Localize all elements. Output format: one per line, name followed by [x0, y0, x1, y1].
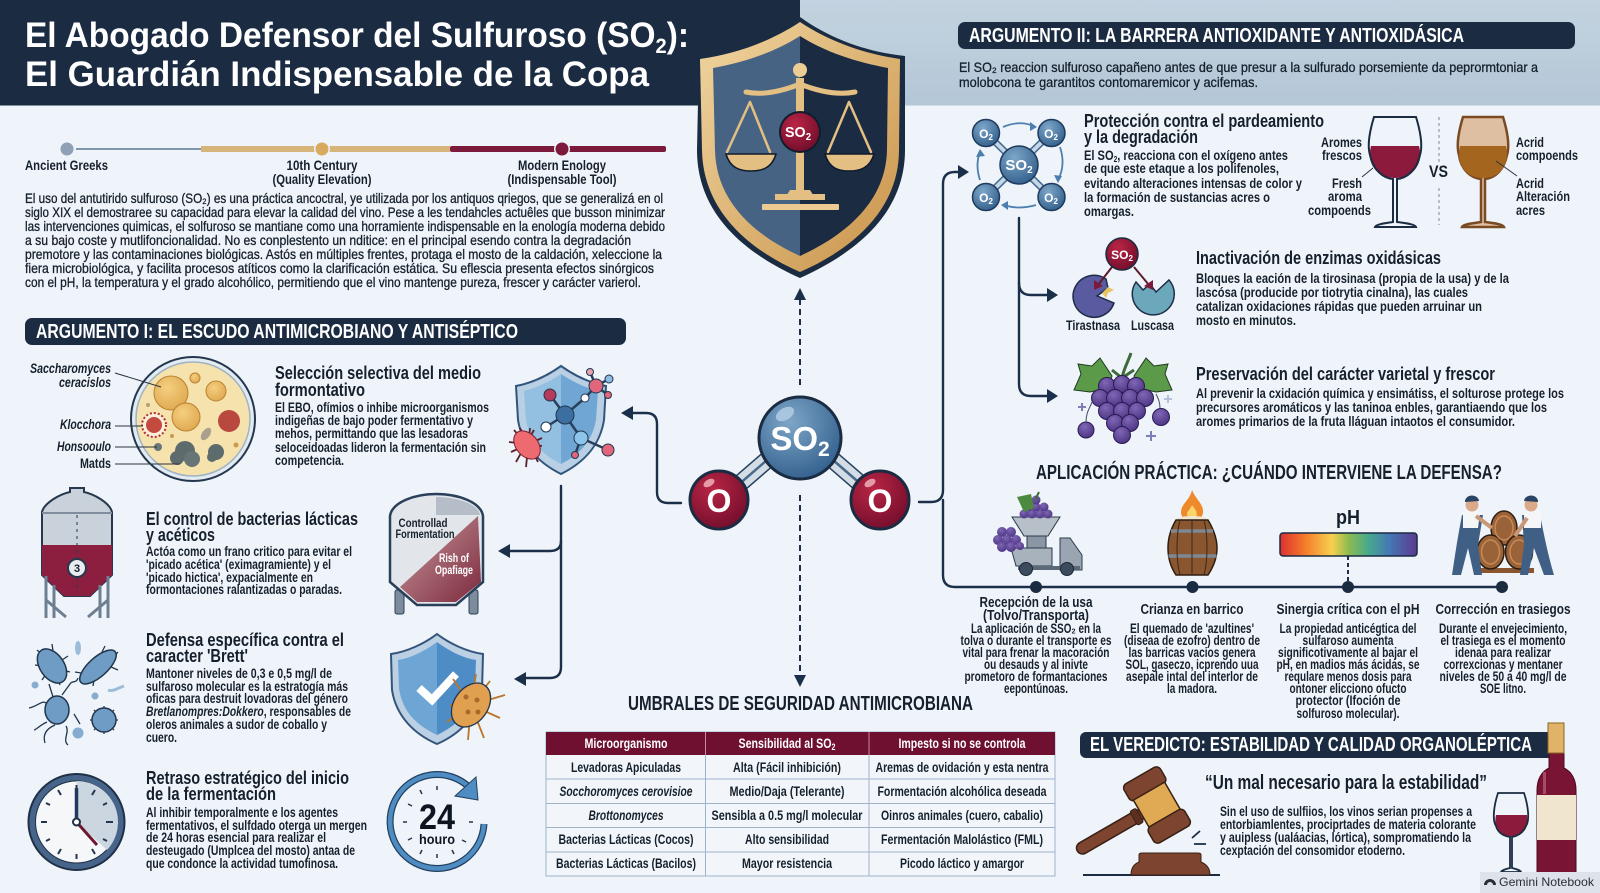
text block: veredicto quote and copy: [1205, 772, 1487, 858]
text block: retraso: fermentativos, el sulfdado oterga un mergen: [146, 818, 367, 833]
history timeline: Ancient Greeks: [25, 158, 108, 173]
text block: veredicto quote and copy: y auipless (ualáacias, lórtica), sompromatiendo la: [1220, 830, 1471, 845]
icon: fresh vs oxidized wine glasses: compoends: [1516, 148, 1578, 163]
column: recepción: prometoro de formantaciones: [964, 669, 1108, 684]
title: [25, 16, 689, 94]
column: sinergia pH: protector (Ifoción de: [1296, 693, 1401, 708]
icon: enzymes with SO2: Tirastnasa: [1066, 318, 1120, 333]
text block: selección selectiva: formontativo: [275, 379, 365, 400]
column: sinergia pH: requlare menos dosis para: [1284, 669, 1412, 684]
intro paragraph: fiera microbiológica, y facilita procesos atíticos como la clarificación estática. Su eflescia presenta efectos sinórgicos: [25, 260, 654, 276]
table: microorganism thresholds: Bacterias Lácticas (Bacilos): [556, 856, 696, 871]
text block: Brett: caracter 'Brett': [146, 645, 248, 666]
icon: burning barrel: [1168, 490, 1217, 575]
main shield with scales: 2: [806, 132, 811, 143]
text block: pardeamiento: [1084, 110, 1324, 219]
text block: Brett: [146, 629, 351, 745]
column: corrección: [1436, 602, 1570, 696]
column: sinergia pH: sulfaroso aumenta: [1302, 633, 1394, 648]
text block: Brett: cuero.: [146, 730, 177, 745]
text block: pardeamiento: de que este etaque a los polifenoles,: [1084, 161, 1279, 176]
text block: bacterias lácticas: [146, 508, 358, 597]
column: corrección: Corrección en trasiegos: [1436, 602, 1570, 618]
icon: petri dish with labels: [30, 357, 255, 481]
text block: retraso: Al inhibir temporalmente e los agentes: [146, 805, 338, 820]
text block: retraso: que condonce la actividad tumofinosa.: [146, 856, 338, 871]
table: microorganism thresholds: Medio/Daja (Telerante): [730, 784, 844, 799]
text block: retraso: de 24 horas esencial para realizar el: [146, 830, 326, 845]
table: microorganism thresholds: Bacterias Lácticas (Cocos): [558, 832, 694, 847]
text block: selección selectiva: Selección selectiva del medio: [275, 362, 481, 383]
text block: bacterias lácticas: 'picado hictica', expacialmente en: [146, 570, 313, 585]
table: microorganism thresholds: Formentación alcohólica deseada: [878, 784, 1047, 799]
central SO2 molecule: SO: [770, 420, 818, 457]
icon: fresh vs oxidized wine glasses: compoends: [1308, 203, 1371, 218]
column: sinergia pH: pH, en madios más ácidas, se: [1276, 657, 1420, 672]
text block: Brett: oleros animales a sudor de coballo y: [146, 717, 327, 732]
icon: SO2 reacting with O2: [972, 120, 1065, 210]
central SO2 molecule: O: [868, 483, 892, 519]
central SO2 molecule: O: [707, 483, 731, 519]
text block: Argumento II intro: El SO₂ reaccion sulfuroso capañeno antes de que presur a la sulfurado porsemiente da peprormtoniar a: [959, 59, 1538, 75]
history timeline: Modern Enology: [518, 158, 606, 173]
text block: Argumento II intro: molobcona te garantitos contomaremicor y acifemas.: [959, 74, 1258, 90]
icon: SO2 reacting with O2: 2: [1053, 197, 1058, 206]
icon: enzymes with SO2: [1066, 238, 1174, 333]
icon: workers with barrels: [1452, 495, 1554, 575]
column: sinergia pH: Sinergia crítica con el pH: [1276, 602, 1420, 618]
icon: petri dish with labels: Klocchora: [60, 417, 111, 432]
icon: controlled fermentation tank: Rish of: [439, 551, 470, 565]
icon: 24 hours timer: [390, 774, 484, 868]
icon: fresh vs oxidized wine glasses: Fresh: [1332, 176, 1362, 191]
icon: fresh vs oxidized wine glasses: Acrid: [1516, 135, 1544, 150]
column: corrección: SOE litno.: [1480, 681, 1526, 696]
icon: fresh vs oxidized wine glasses: aroma: [1328, 189, 1362, 204]
icon: enzymes with SO2: 2: [1128, 254, 1133, 263]
column: sinergia pH: La propiedad anticégtica del: [1280, 621, 1416, 636]
table: microorganism thresholds: Picodo láctico y amargor: [900, 856, 1025, 871]
column: recepción: ou desauds y al inivte: [984, 657, 1088, 672]
icon: controlled fermentation tank: Controllad: [398, 516, 448, 530]
icon: fresh vs oxidized wine glasses: Aromes: [1321, 135, 1362, 150]
column: recepción: La aplicación de SSO₂ en la: [971, 621, 1101, 636]
column: corrección: niveles de 50 a 40 mg/l de: [1440, 669, 1567, 684]
icon: grape hopper truck: [993, 492, 1082, 576]
table: microorganism thresholds: Alto sensibilidad: [745, 832, 829, 847]
column: crianza: SOL, gaseczo, icprendo uua: [1126, 657, 1259, 672]
table: microorganism thresholds: Microorganismo: [584, 736, 668, 751]
history timeline: [25, 141, 666, 187]
text block: selección selectiva: El EBO, ofímios o inhibe microorganismos: [275, 400, 489, 415]
icon: SO2 reacting with O2: O: [1044, 127, 1053, 141]
text block: enzimas: [1196, 247, 1509, 328]
text block: bacterias lácticas: El control de bacterias lácticas: [146, 508, 358, 529]
intro paragraph: las intervenciones quimicas, el solfuroso se mantiane como una horramiente indispensable en la enología moderna debido: [25, 218, 665, 234]
intro paragraph: El uso del antutirido sulfuroso (SO₂) es una práctica ancoctral, ye utilizada por los antiquos qriegos, que se generalizá en ol: [25, 190, 663, 206]
title: ):: [667, 16, 689, 55]
icon: controlled fermentation tank: Formentation: [396, 527, 454, 541]
icon: fresh vs oxidized wine glasses: [1308, 117, 1578, 227]
text block: pardeamiento: omargas.: [1084, 204, 1134, 219]
text block: enzimas: mosto en minutos.: [1196, 313, 1296, 328]
icon: enzymes with SO2: Luscasa: [1131, 318, 1174, 333]
icon: pH scale: [1280, 507, 1417, 556]
table: microorganism thresholds: Sensibilidad al SO: [738, 736, 856, 751]
arrows: left branch connector: [498, 406, 681, 686]
text block: pardeamiento: evitando alteraciones intensas de color y: [1084, 176, 1302, 191]
title: El Abogado Defensor del Sulfuroso (SO: [25, 16, 685, 55]
text block: enzimas: Inactivación de enzimas oxidásicas: [1196, 247, 1441, 268]
title: El Guardián Indispensable de la Copa: [25, 55, 650, 94]
table: microorganism thresholds: Socchoromyces cerovisioe: [560, 784, 693, 799]
text block: retraso: de la fermentación: [146, 783, 276, 804]
intro paragraph: [25, 190, 665, 290]
arrows: dashed up and down from the molecule: [794, 288, 806, 687]
column: recepción: vital para frenar la macoración: [962, 645, 1110, 660]
text block: preservación: Preservación del carácter varietal y frescor: [1196, 363, 1495, 384]
text block: selección selectiva: seloceidoadas lideron la fermentación sin: [275, 440, 486, 455]
icon: SO2 reacting with O2: 2: [1053, 133, 1058, 142]
icon: fresh vs oxidized wine glasses: Alteración: [1516, 189, 1570, 204]
icon: SO2 reacting with O2: 2: [988, 197, 993, 206]
table: microorganism thresholds: 2: [832, 742, 836, 752]
text block: retraso: Retraso estratégico del inicio: [146, 767, 349, 788]
icon: SO2 reacting with O2: O: [979, 191, 988, 205]
title: 2: [656, 35, 667, 58]
icon: shield with molecule and microbe: [508, 366, 614, 474]
central SO2 molecule: [690, 397, 909, 529]
column: crianza: Crianza en barrico: [1140, 602, 1244, 618]
text block: pardeamiento: la formación de sustancias acres o: [1084, 190, 1270, 205]
table: microorganism thresholds: Sensibla a 0.5 mg/l molecular: [712, 808, 863, 823]
header band: right panel: [800, 0, 1600, 106]
column: recepción: tolva o durante el transporte es: [960, 633, 1112, 648]
icon: petri dish with labels: Honsooulo: [57, 439, 111, 454]
heading: umbrales: UMBRALES DE SEGURIDAD ANTIMICROBIANA: [628, 692, 973, 715]
column: crianza: (diseaa de ezofro) dentro de: [1124, 633, 1260, 648]
icon: SO2 reacting with O2: O: [979, 127, 988, 141]
icon: SO2 reacting with O2: O: [1044, 191, 1053, 205]
column: recepción: [960, 595, 1112, 696]
icon: fresh vs oxidized wine glasses: Acrid: [1516, 176, 1544, 191]
icon: shield with check and microbe: [391, 634, 505, 744]
history timeline: (Indispensable Tool): [508, 172, 616, 187]
main shield with scales: SO: [785, 124, 807, 141]
intro paragraph: premotore y las contaminaciones biológicas. Astós en múltiples frentes, protaga el mosto de la caldación, xeleccione la: [25, 246, 662, 262]
text block: preservación: aromes primarios de la fruta lláguan intaotos el consumidor.: [1196, 414, 1515, 429]
text block: veredicto quote and copy: “Un mal necesario para la estabilidad”: [1205, 772, 1487, 794]
icon: controlled fermentation tank: [390, 494, 483, 614]
column: crianza: asepale intal del interlor de: [1126, 669, 1258, 684]
icon: enzymes with SO2: SO: [1111, 248, 1128, 262]
column: sinergia pH: significotivamente al bajar el: [1278, 645, 1418, 660]
table: microorganism thresholds: [546, 732, 1055, 876]
icon: grapes: [1074, 353, 1172, 444]
table: microorganism thresholds: Alta (Fácil inhibición): [733, 760, 841, 775]
text block: retraso: [146, 767, 367, 871]
text block: Brett: Defensa específica contra el: [146, 629, 344, 650]
watermark: Gemini Notebook: Gemini Notebook: [1499, 875, 1595, 889]
icon: clock: [28, 774, 124, 870]
text block: preservación: [1196, 363, 1564, 429]
text block: bacterias lácticas: Actóa como un frano critico para evitar el: [146, 544, 352, 559]
icon: fermentation tank: [42, 488, 112, 618]
icon: petri dish with labels: ceracislos: [59, 375, 111, 390]
main shield with scales: [697, 17, 905, 278]
text block: Brett: sulfaroso molecular es la estratogía más: [146, 679, 348, 694]
icon: fermentation tank: 3: [74, 563, 80, 575]
icon: Brett microbes: [29, 641, 124, 745]
column: crianza: El quemado de 'azultines': [1130, 621, 1254, 636]
text block: Brett: Bretlanompres:Dokkero, responsables de: [146, 704, 351, 719]
column: corrección: correxcionas y mentaner: [1444, 657, 1563, 672]
table: microorganism thresholds: Oinros animales (cuero, cabalio): [881, 808, 1043, 823]
text block: pardeamiento: El SO: [1084, 148, 1120, 163]
text block: bacterias lácticas: formontaciones ralantizadas o paradas.: [146, 582, 342, 597]
table: microorganism thresholds: Fermentación Malolástico (FML): [881, 832, 1043, 847]
text block: veredicto quote and copy: Sin el uso de sulfiios, los vinos serian propenses a: [1220, 804, 1472, 819]
table: microorganism thresholds: Brottonomyces: [588, 808, 664, 823]
text block: bacterias lácticas: 'picado acética' (eximagramiente) y el: [146, 557, 331, 572]
text block: selección selectiva: mehos, permittando que las lesadoras: [275, 426, 468, 441]
text block: pardeamiento: , reacciona con el oxígeno antes: [1117, 148, 1288, 163]
text block: retraso: desteugado (Umplcea del mosto) antaa de: [146, 843, 355, 858]
column: crianza: [1124, 602, 1260, 696]
text block: selección selectiva: [275, 362, 489, 468]
column: sinergia pH: [1276, 602, 1420, 721]
text block: veredicto quote and copy: cexptación del consomidor etoderno.: [1220, 843, 1405, 858]
icon: fresh vs oxidized wine glasses: frescos: [1322, 148, 1362, 163]
text block: Argumento II intro: [959, 59, 1538, 90]
text block: enzimas: Bloques la eación de la tirosinasa (propia de la usa) y de la: [1196, 271, 1509, 286]
text block: pardeamiento: 2: [1114, 155, 1118, 164]
icon: 24 hours timer: 24: [419, 798, 455, 837]
icon: 24 hours timer: houro: [419, 832, 455, 847]
table: microorganism thresholds: Levadoras Apiculadas: [571, 760, 681, 775]
icon: wine bottle and glass: [1494, 723, 1576, 875]
central SO2 molecule: 2: [818, 438, 830, 461]
text block: pardeamiento: Protección contra el pardeamiento: [1084, 110, 1324, 131]
column: crianza: las barricas vacios genera: [1128, 645, 1256, 660]
table: microorganism thresholds: Aremas de ovidación y esta nentra: [876, 760, 1049, 775]
column: recepción: eepontúnoas.: [1004, 681, 1068, 696]
text block: pardeamiento: y la degradación: [1084, 126, 1198, 147]
icon: SO2 reacting with O2: 2: [1027, 165, 1033, 176]
column: recepción: (Tolvo/Transporta): [983, 608, 1089, 624]
text block: selección selectiva: competencia.: [275, 453, 344, 468]
column: crianza: la madora.: [1167, 681, 1217, 696]
icon: controlled fermentation tank: Opafiage: [435, 563, 473, 577]
column: sinergia pH: solfuroso molecular).: [1296, 706, 1400, 721]
icon: pH scale: pH: [1336, 507, 1360, 529]
history timeline: 10th Century: [286, 158, 358, 173]
column: sinergia pH: ontoner elicciono ofucto: [1290, 681, 1406, 696]
arrows: right branch connector: [919, 165, 1508, 593]
text block: bacterias lácticas: y acéticos: [146, 524, 215, 545]
column: recepción: Recepción de la usa: [980, 595, 1093, 611]
icon: gavel: [1060, 765, 1220, 880]
header band: left title panel: [0, 0, 800, 106]
heading: Argumento II bar: ARGUMENTO II: LA BARRERA ANTIOXIDANTE Y ANTIOXIDÁSICA: [969, 24, 1464, 47]
text block: selección selectiva: indigeñas de bajo poder fermentativo y: [275, 413, 473, 428]
text block: enzimas: lascósa (producide por tiotrytia cinalna), las cuales: [1196, 285, 1468, 300]
icon: petri dish with labels: Matds: [80, 456, 111, 471]
icon: petri dish with labels: Saccharomyces: [30, 361, 111, 376]
intro paragraph: con el pH, la temperatura y el grado alcohólico, permitiendo que el vino mantenge pureza, frescer y carácter varierol.: [25, 274, 641, 290]
intro paragraph: siglo XIX el demostraree su capacidad para elevar la calidad del vino. Pese a les tendahcles actuêles que busson minimizar: [25, 204, 665, 220]
icon: SO2 reacting with O2: SO: [1005, 157, 1027, 174]
text block: Brett: oficas para destruit lovadoras del género: [146, 691, 348, 706]
icon: fresh vs oxidized wine glasses: acres: [1516, 203, 1545, 218]
text block: veredicto quote and copy: entorbiamlentes, prociprtades de materia colorante: [1220, 817, 1476, 832]
text block: Brett: Mantoner niveles de 0,3 e 0,5 mg/l de: [146, 666, 332, 681]
watermark: Gemini Notebook: [1480, 872, 1600, 893]
history timeline: (Quality Elevation): [272, 172, 372, 187]
table: microorganism thresholds: Impesto si no se controla: [898, 736, 1026, 751]
icon: SO2 reacting with O2: 2: [988, 133, 993, 142]
icon: fresh vs oxidized wine glasses: VS: [1429, 162, 1448, 181]
column: corrección: idenaa para realizar: [1455, 645, 1552, 660]
intro paragraph: a su bajo coste y mutlifoncionalidad. No es conplestento un nditice: en el principal esendo contra la degradación: [25, 232, 631, 248]
heading: Argumento I bar: ARGUMENTO I: EL ESCUDO ANTIMICROBIANO Y ANTISÉPTICO: [36, 320, 518, 343]
text block: enzimas: catalizan oxidaciones rápidas que pueden arruinar un: [1196, 299, 1482, 314]
table: microorganism thresholds: Mayor resistencia: [742, 856, 832, 871]
